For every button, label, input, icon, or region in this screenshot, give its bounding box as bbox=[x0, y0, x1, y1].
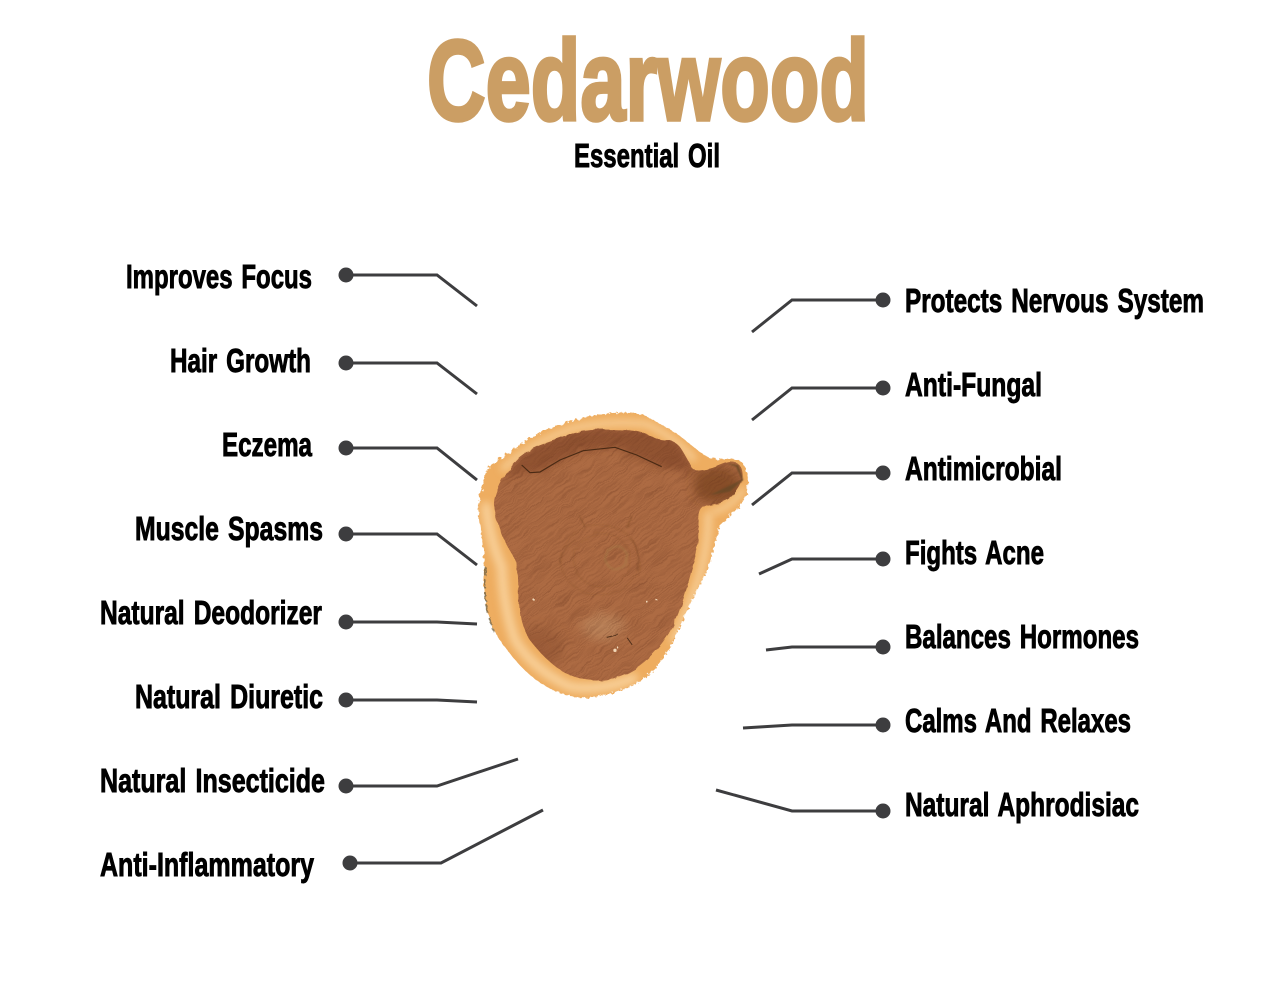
callout: Balances Hormones bbox=[766, 618, 1139, 655]
callout: Anti-Inflammatory bbox=[100, 810, 543, 883]
connector bbox=[342, 810, 543, 870]
heartwood bbox=[494, 428, 743, 682]
connector bbox=[338, 614, 477, 630]
knot bbox=[710, 463, 743, 495]
connector bbox=[338, 759, 518, 794]
label: Calms And Relaxes bbox=[905, 702, 1131, 739]
connector bbox=[752, 292, 890, 332]
connector bbox=[743, 718, 890, 732]
connector bbox=[338, 692, 477, 708]
callout: Anti-Fungal bbox=[752, 366, 1042, 420]
label: Anti-Fungal bbox=[905, 366, 1042, 403]
label: Balances Hormones bbox=[905, 618, 1139, 655]
pale flecks bbox=[532, 598, 657, 651]
label: Eczema bbox=[222, 426, 312, 463]
bark and sapwood bbox=[478, 412, 748, 698]
callout: Protects Nervous System bbox=[752, 282, 1204, 332]
label: Natural Diuretic bbox=[135, 678, 323, 715]
dark upper band bbox=[503, 428, 695, 478]
connector bbox=[338, 356, 477, 394]
label: Hair Growth bbox=[170, 342, 311, 379]
connector bbox=[338, 268, 477, 306]
connector bbox=[752, 380, 890, 420]
label: Muscle Spasms bbox=[135, 510, 323, 547]
title: Cedarwood bbox=[427, 18, 869, 145]
connector bbox=[752, 466, 890, 505]
label: Improves Focus bbox=[126, 258, 312, 295]
label: Natural Insecticide bbox=[100, 762, 325, 799]
callout: Natural Deodorizer bbox=[100, 594, 477, 631]
crack bbox=[522, 447, 662, 473]
callout: Natural Insecticide bbox=[100, 759, 518, 799]
subtitle: Essential Oil bbox=[574, 137, 720, 174]
callout: Eczema bbox=[222, 426, 477, 480]
callout: Fights Acne bbox=[759, 534, 1044, 574]
label: Anti-Inflammatory bbox=[100, 846, 314, 883]
bark edge bbox=[485, 567, 494, 632]
connector bbox=[716, 790, 890, 818]
callout: Muscle Spasms bbox=[135, 510, 477, 565]
callout: Natural Aphrodisiac bbox=[716, 786, 1139, 823]
callout: Calms And Relaxes bbox=[743, 702, 1131, 739]
callout: Hair Growth bbox=[170, 342, 477, 394]
label: Fights Acne bbox=[905, 534, 1044, 571]
label: Natural Deodorizer bbox=[100, 594, 322, 631]
connector bbox=[338, 440, 477, 480]
connector bbox=[766, 640, 890, 654]
connector bbox=[759, 552, 890, 574]
callout: Improves Focus bbox=[126, 258, 477, 306]
label: Antimicrobial bbox=[905, 450, 1062, 487]
lower dark fissures bbox=[607, 635, 633, 645]
connector bbox=[338, 526, 477, 565]
growth rings bbox=[559, 516, 640, 572]
label: Natural Aphrodisiac bbox=[905, 786, 1139, 823]
image: cedarwood cross-section bbox=[342, 369, 890, 862]
callout: Antimicrobial bbox=[752, 450, 1062, 505]
pale sapwood streaks bbox=[486, 423, 743, 688]
callout: Natural Diuretic bbox=[135, 678, 477, 715]
